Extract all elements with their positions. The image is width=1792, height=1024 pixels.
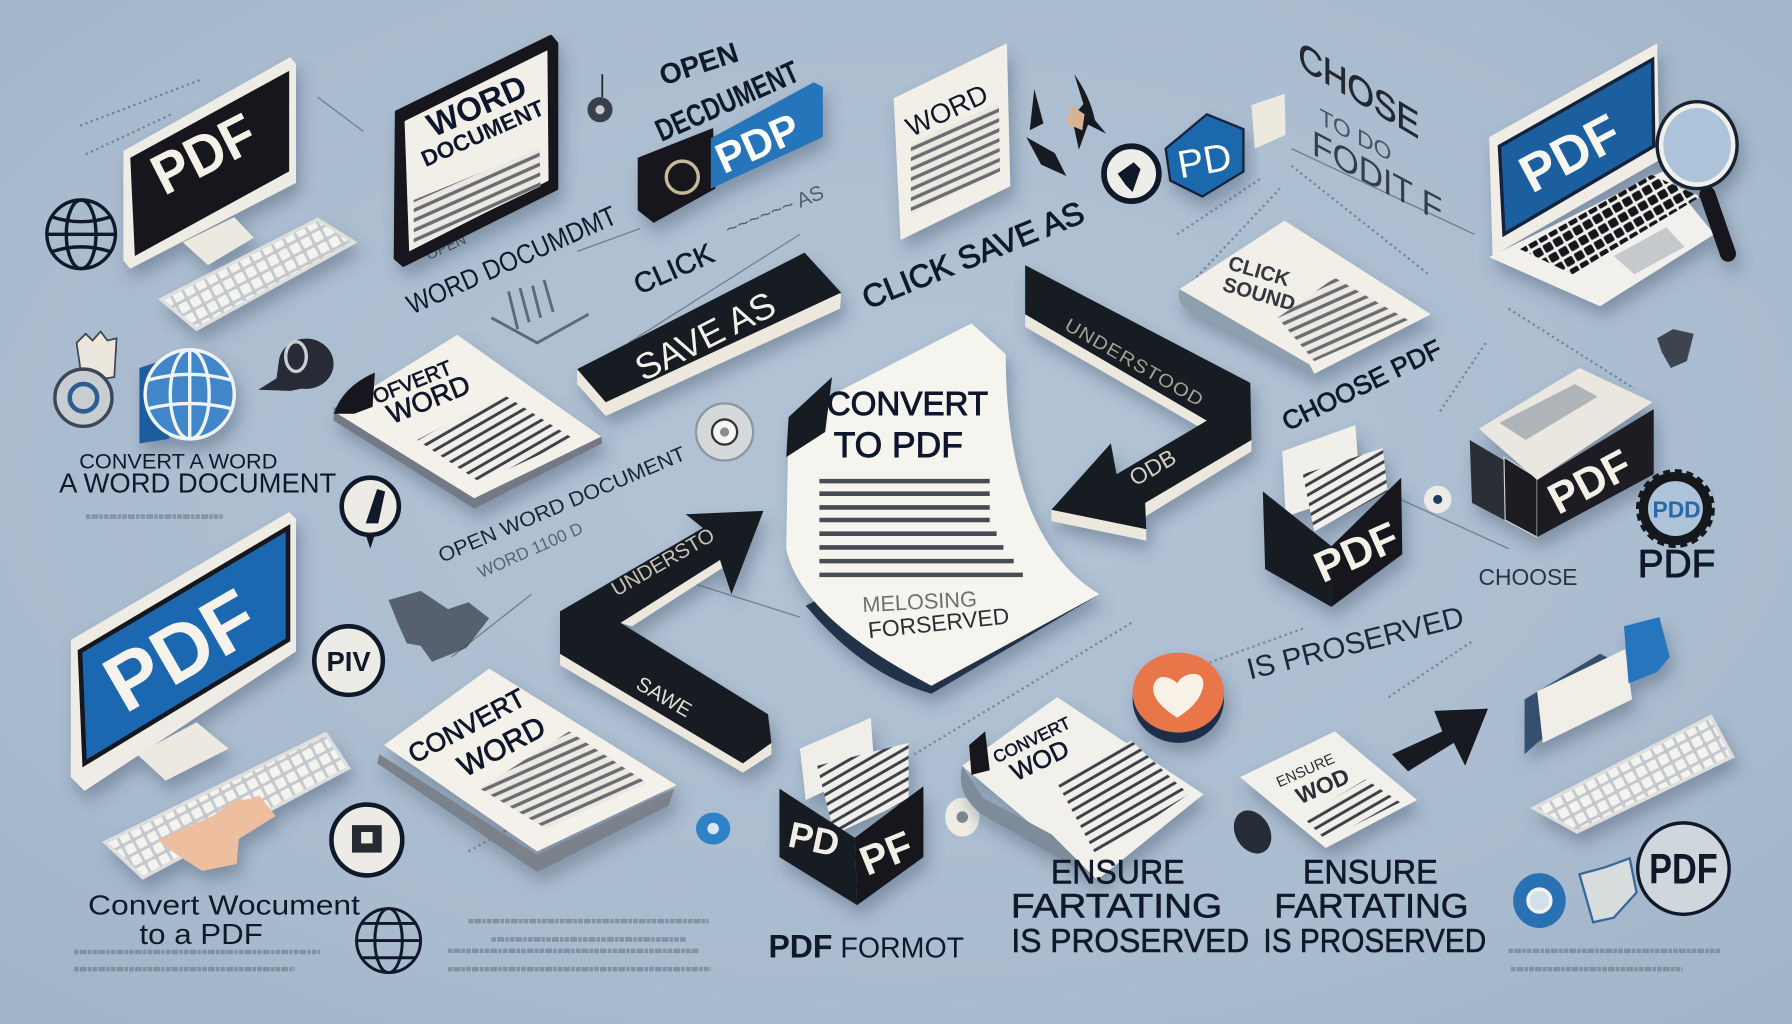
label: choose pdf: CHOOSE PDF [1277, 334, 1446, 437]
small captions: left column [86, 515, 223, 519]
heading: WOD [1292, 763, 1353, 809]
heading: convert document to a pdf: to a PDF [139, 919, 263, 951]
icon: circle badge, bottom left [331, 805, 402, 875]
arrow: black arrow pointing left [1025, 265, 1251, 541]
icon: circled PDF: PDF [1649, 846, 1718, 893]
heart [1153, 674, 1203, 718]
document shadow sheet [806, 503, 1099, 694]
page sheet [894, 43, 1010, 240]
button: black and blue PDP card [638, 82, 823, 223]
sheet [1240, 731, 1417, 848]
label: PDF [1540, 441, 1640, 524]
heading: ensure formatting, first: IS PROSERVED [1011, 923, 1249, 960]
icon: gear badge: PDD [1652, 497, 1701, 523]
stand [137, 722, 229, 781]
right label: PF [853, 822, 919, 884]
left face [779, 789, 857, 905]
tablet page [405, 50, 549, 251]
sheet [962, 697, 1203, 880]
laptop screen [1499, 59, 1654, 234]
papers [800, 718, 874, 800]
heading: convert document to a pdf: Convert Wocument [88, 889, 360, 920]
paper: ensure word [1240, 731, 1417, 848]
bar text: SAVE AS [628, 284, 782, 389]
icon: hand [77, 331, 117, 382]
label: chose to do: TO DO [1319, 104, 1391, 168]
arrow text: UNDERSTOOD [1061, 315, 1208, 411]
card dark part [638, 128, 715, 223]
group: hand and target icons [55, 331, 117, 426]
monitor frame [123, 57, 296, 269]
paper: click sound page [1179, 221, 1431, 374]
center document: convert to pdf: FORSERVED [867, 603, 1010, 643]
icon: dark speech balloon [258, 339, 334, 391]
papers [1282, 425, 1360, 517]
icon: PDF box with papers [779, 718, 923, 905]
laptop trackpad [1614, 227, 1685, 274]
laptop base [1489, 171, 1714, 306]
heading: ensure formatting, first: FARTATING [1011, 888, 1222, 926]
document heading: TO PDF [834, 425, 963, 465]
icon: laptop with PDF and magnifier [1489, 43, 1737, 306]
heading: ENSURE [1274, 751, 1337, 791]
document sheet [786, 323, 1099, 686]
magnifier handle [1707, 194, 1728, 254]
heading: ensure formatting, second: ENSURE [1303, 853, 1438, 891]
sheet [1179, 221, 1431, 374]
icon: blue hexagon with PD [1166, 114, 1243, 197]
page stripes [911, 103, 1000, 215]
towers [1470, 440, 1537, 537]
icon: small blue circle [696, 813, 730, 845]
card emblem [666, 161, 698, 193]
label: open word document rotated: WORD 1100 D [474, 518, 586, 582]
heading: ensure formatting, first [1011, 853, 1249, 960]
arrow upper text: UNDERSTO [607, 524, 719, 601]
icon: keyboard, lower right [1534, 717, 1733, 832]
label: chose to do: FODIT F [1312, 122, 1442, 231]
arrow: small black arrow [1392, 709, 1488, 771]
heading: convert document to a pdf [88, 889, 360, 951]
caption lines: bottom right [1509, 951, 1720, 969]
tablet heading: WORD [422, 68, 533, 145]
arrow edge [1025, 314, 1207, 427]
blurred note: as: ~~~~~~ AS [722, 181, 827, 241]
monitor screen [130, 71, 289, 256]
icon: keyboard with typing hand [105, 734, 349, 878]
stripes [1303, 779, 1400, 840]
arrow: black arrow pointing left: ODB [1125, 444, 1181, 491]
heading: WORD [453, 710, 551, 784]
sheet [334, 335, 601, 498]
monitor stand [183, 217, 254, 265]
icon: gear badge [1639, 472, 1712, 545]
heading: WOD [1006, 735, 1074, 787]
label: click: CLICK [629, 238, 719, 301]
icon: small dark dot marker [587, 74, 613, 122]
frame [71, 512, 296, 791]
label: is proserved rotated: IS PROSERVED [1244, 600, 1467, 686]
icon: circle badge [1104, 146, 1159, 201]
caption lines: bottom center [448, 921, 711, 969]
paper: WORD page [894, 43, 1010, 240]
arrow edge [560, 654, 771, 773]
laptop screen label: PDF [1510, 103, 1630, 204]
card label: PDP [708, 104, 807, 182]
page heading: WORD [901, 78, 993, 143]
small dark cup [1226, 804, 1279, 860]
sheet [384, 669, 677, 851]
bar face [577, 253, 841, 402]
stack edge [334, 407, 602, 509]
icon: circled PDF [1638, 823, 1729, 914]
stripes [417, 394, 574, 482]
label: open word document rotated: OPEN WORD DOCUMENT [435, 443, 689, 567]
heading: convert a word document: CONVERT A WORD [79, 449, 277, 474]
caption lines: bottom left [74, 952, 320, 969]
heading: ensure formatting, first: ENSURE [1051, 853, 1185, 891]
heading: CONVERT [990, 712, 1074, 767]
card blue part [711, 82, 823, 189]
tablet body [395, 37, 557, 265]
center document: convert to pdf [786, 323, 1099, 694]
paper stack: convert word [377, 669, 677, 872]
laptop keys [1520, 175, 1701, 274]
arrow light fold [621, 560, 722, 626]
icon: printer / server with PDF [1470, 368, 1654, 537]
caption: open word document: OPEN [424, 232, 469, 264]
document heading [827, 386, 988, 465]
dark scribble [389, 591, 489, 662]
heading: convert a word document [59, 449, 337, 499]
heading: convert a word document: A WORD DOCUMENT [59, 468, 337, 499]
curl [334, 373, 375, 414]
page [1537, 649, 1632, 743]
curl [969, 731, 990, 775]
label: chose to do: CHOSE [1299, 33, 1419, 148]
paper: convert word page [334, 335, 602, 509]
small scribble right top [1657, 329, 1694, 368]
stripes [480, 731, 647, 829]
small scribble: hand cursor [491, 280, 589, 343]
button: orange heart [1133, 653, 1224, 743]
tablet heading [404, 65, 548, 172]
paper: click sound page: SOUND [1220, 273, 1298, 316]
stripes [1278, 278, 1408, 361]
heading: CONVERT [403, 682, 530, 769]
heading [1274, 751, 1353, 809]
stack pages [377, 754, 674, 872]
laptop lid [1489, 43, 1659, 256]
icon: keyboard, top left [161, 219, 354, 329]
icon: blue globe [139, 350, 234, 443]
hand [158, 795, 275, 871]
arrow: black arrow up and around [560, 511, 771, 773]
keyboard [105, 734, 349, 878]
label: click save as: CLICK SAVE AS [857, 194, 1089, 316]
document text lines [819, 481, 1023, 575]
monitor label: PDF [141, 101, 267, 207]
label: open document: OPEN [655, 37, 742, 92]
icon: circle PDF badge [314, 626, 383, 695]
dotted connectors [80, 80, 1634, 851]
label: pdf format: PDF FORMOT [768, 929, 964, 965]
label: PDF [1307, 513, 1406, 593]
icon: desktop monitor with PDF, top left [123, 57, 296, 269]
label: chose to do [1299, 33, 1442, 231]
caption: open word document: WORD DOCUMDMT [402, 201, 622, 320]
icon: circle PDF badge: PIV [326, 646, 371, 677]
icon: target [55, 369, 112, 426]
bar edge [577, 265, 841, 416]
heading: ensure formatting, second [1263, 853, 1486, 960]
heading: CLICK [1226, 252, 1292, 291]
tray [1525, 654, 1623, 754]
heading: OFVERT [370, 356, 456, 409]
icon: small ring [696, 403, 753, 461]
left face [1263, 491, 1331, 607]
label: choose: CHOOSE [1478, 564, 1578, 590]
hairline connectors [318, 97, 1509, 657]
document curled corner [786, 377, 832, 457]
label: open document: DECDUMENT [650, 54, 804, 148]
icon: small note [1251, 94, 1286, 149]
screen [80, 528, 288, 763]
right face [855, 786, 923, 905]
tablet heading: DOCUMENT [417, 94, 548, 172]
heading: WORD [382, 369, 474, 430]
arrow body [560, 511, 771, 763]
icon: blue ring [1513, 873, 1566, 928]
document footer text: MELOSING [862, 586, 977, 617]
paper: convert word, lower [961, 697, 1203, 880]
icon: globe, bottom [357, 909, 421, 973]
bar: save as [577, 253, 841, 416]
icon: small figure [1579, 858, 1637, 922]
arrow body [1025, 265, 1251, 529]
tablet text lines [414, 149, 541, 247]
icon: speech circle [342, 478, 399, 549]
blue block [1624, 617, 1670, 683]
right face [1331, 478, 1402, 607]
top [1479, 368, 1653, 480]
label: PDF [89, 572, 272, 729]
curled corner [1179, 289, 1314, 374]
left label: PD [785, 814, 843, 865]
icon: blue hexagon with PD: PD [1174, 136, 1235, 187]
icon: blue tray printer [1525, 617, 1670, 754]
small dark scribble icons [1026, 74, 1106, 176]
label: pdf large right: PDF [1638, 543, 1715, 586]
magnifier lens [1661, 105, 1734, 185]
document heading: CONVERT [827, 386, 988, 423]
icon: globe outline, top left [47, 200, 115, 269]
icon: lower-left monitor with PDF [71, 512, 296, 791]
heading: ensure formatting, second: FARTATING [1274, 888, 1469, 926]
stripes [1057, 741, 1189, 857]
arrow lower text: SAWE [632, 672, 695, 722]
icon: folder box with PDF, right [1263, 425, 1406, 607]
small ring [1424, 486, 1451, 513]
front [1537, 409, 1654, 537]
small ring [945, 798, 979, 837]
heading: ensure formatting, second: IS PROSERVED [1263, 923, 1486, 960]
icon: Word document tablet [395, 37, 557, 265]
